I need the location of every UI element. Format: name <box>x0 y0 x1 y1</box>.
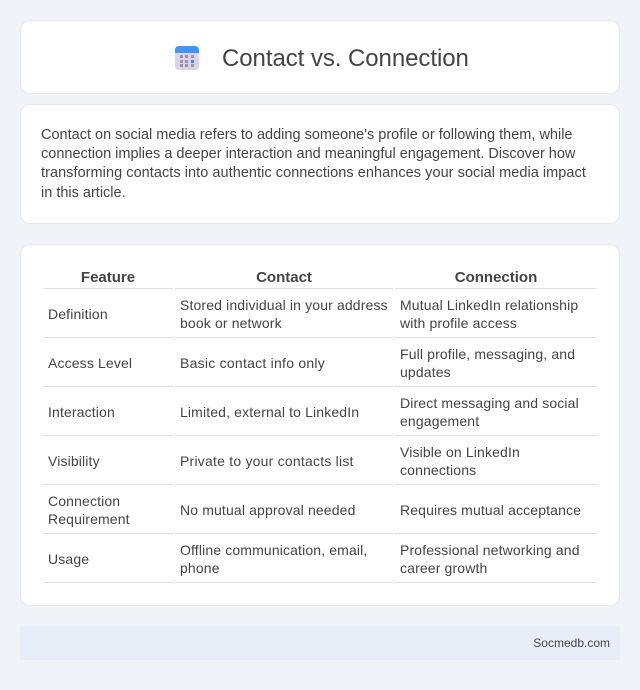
intro text: connection implies a deeper interaction and meaningful engagement. Discover how <box>41 146 575 162</box>
comparison table: phone <box>180 560 220 576</box>
intro text: transforming contacts into authentic connections enhances your social media impact <box>41 165 586 181</box>
comparison table: Stored individual in your address <box>180 297 388 313</box>
comparison table: updates <box>400 364 451 380</box>
row: Usage: Usage <box>48 551 89 567</box>
intro text: Contact on social media refers to adding someone's profile or following them, while <box>41 127 572 143</box>
comparison table: Requires mutual acceptance <box>400 502 581 518</box>
row: Connection Requirement: Requirement <box>48 511 130 527</box>
heading: Contact vs. Connection <box>222 45 469 72</box>
row: Access Level: Access Level <box>48 355 132 371</box>
comparison table: Offline communication, email, <box>180 542 367 558</box>
comparison table: with profile access <box>400 315 517 331</box>
row: Interaction: Interaction <box>48 404 115 420</box>
intro text: in this article. <box>41 185 126 201</box>
comparison table: No mutual approval needed <box>180 502 356 518</box>
comparison table: Mutual LinkedIn relationship <box>400 297 578 313</box>
comparison table: career growth <box>400 560 487 576</box>
header: Connection: Connection <box>455 269 537 286</box>
comparison table: engagement <box>400 413 479 429</box>
comparison table: Private to your contacts list <box>180 453 354 469</box>
comparison table: Limited, external to LinkedIn <box>180 404 359 420</box>
intro panel <box>20 104 620 224</box>
header: Feature: Feature <box>81 269 135 286</box>
row: Connection Requirement: Connection <box>48 493 120 509</box>
comparison table: connections <box>400 462 476 478</box>
icon: calendar <box>175 46 199 70</box>
row: Visibility: Visibility <box>48 453 100 469</box>
table panel <box>20 244 620 606</box>
header: Contact: Contact <box>256 269 312 286</box>
comparison table: Basic contact info only <box>180 355 325 371</box>
comparison table: book or network <box>180 315 282 331</box>
intro text <box>41 127 586 201</box>
footer bar <box>20 626 620 660</box>
footer credit: Socmedb.com <box>533 636 610 650</box>
row: Connection Requirement <box>48 493 130 527</box>
row: Definition: Definition <box>48 306 108 322</box>
title card <box>20 20 620 94</box>
comparison table: Visible on LinkedIn <box>400 444 520 460</box>
comparison table: Professional networking and <box>400 542 580 558</box>
comparison table: Full profile, messaging, and <box>400 346 575 362</box>
comparison table: Direct messaging and social <box>400 395 579 411</box>
